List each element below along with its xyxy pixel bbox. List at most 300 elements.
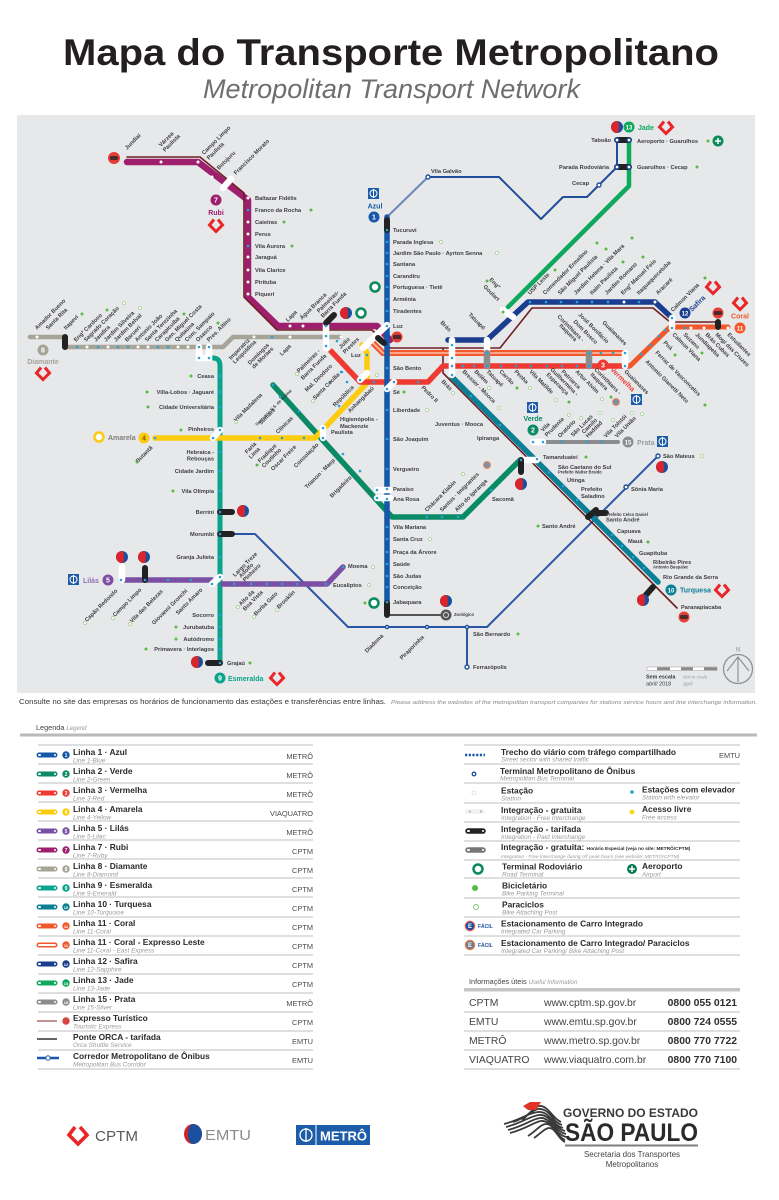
scale bar: Sem escala — [646, 674, 676, 680]
labels: line 15 and line 10: Vila Tolstói — [603, 414, 629, 439]
labels: line 15 and line 10: Paranapiacaba — [681, 605, 722, 611]
labels: line 8 Diamante: Jandira — [93, 324, 112, 343]
labels: line 7 Rubi: Palmeiras- — [316, 290, 341, 314]
icons: car parking stations — [484, 398, 620, 468]
labels: line 3 and line 11: Mogi das Cruzes — [714, 332, 750, 368]
label: Grajaú: Grajaú — [227, 661, 246, 667]
labels: line 4 Amarela: Butantã — [135, 445, 155, 464]
labels: northeast lines: Brás — [439, 320, 452, 333]
labels: line 1 Azul: Jardim São Paulo · Ayrton Senna — [393, 251, 483, 257]
labels: line 9 Esmeralda: Granja Julieta — [176, 555, 215, 561]
labels: line 5 Lilás: Giovanni Gronchi — [151, 588, 189, 626]
legend badges: 1 — [65, 753, 68, 759]
symbol: car parking: FÁCIL — [478, 923, 493, 930]
labels: line 15 and line 10: Prefeito Celso Daniel — [606, 512, 648, 517]
logo: EMTU: EMTU — [205, 1127, 251, 1144]
legend: line names: Line 11-Coral - East Express — [73, 948, 155, 954]
labels: line 15 and line 10: Saladino — [581, 494, 605, 500]
logo: Governo do Estado de São Paulo: Metropolitanos — [606, 1160, 658, 1169]
labels: northeast lines: Itaim Paulista — [589, 266, 620, 296]
labels: northeast lines: São Miguel Paulista — [557, 254, 600, 296]
line badges: 5 — [106, 578, 110, 584]
labels: line 15 and line 10: Vila União — [614, 415, 638, 439]
line: tourist express — [127, 157, 717, 608]
labels: line 15 and line 10: Santo André — [542, 524, 576, 530]
symbol: car parking and bike post — [465, 940, 493, 950]
line names: Esmeralda — [228, 676, 264, 683]
labels: line 3 and line 11: Guaianases — [601, 320, 627, 347]
legend: line names: Line 4-Yellow — [73, 814, 111, 822]
labels: line 3 and line 11: Guilhermina - — [549, 367, 579, 397]
symbol labels: Estações com elevador — [642, 784, 736, 794]
labels: line 7 Rubi — [124, 125, 349, 323]
labels: line 15 and line 10: Santo André — [606, 518, 640, 524]
line badges: 4 — [142, 436, 146, 442]
labels: line 8 Diamante: Lapa — [279, 343, 293, 357]
labels: line 5 Lilás: Santo Amaro — [175, 587, 205, 616]
labels: northeast lines: USP Leste — [527, 272, 551, 296]
legend: line names: Line 1-Blue — [73, 758, 106, 764]
labels: line 3 and line 11: Corinthians - — [556, 314, 585, 343]
labels: line 3 and line 11: Patriarca — [560, 369, 582, 391]
labels: line 1 Azul: Vergueiro — [393, 467, 420, 473]
legend: line names: CPTM — [292, 942, 313, 951]
labels: line 9 Esmeralda: Berrini — [196, 510, 214, 516]
labels: northeast lines: Aracaré — [655, 277, 674, 296]
labels: line 5 Lilás: Capão Redondo — [84, 588, 120, 623]
labels: line 8 Diamante: Barueri — [124, 325, 143, 343]
line 2 Verde — [273, 385, 520, 517]
labels: line 4 Amarela: Oscar Freire — [270, 444, 298, 472]
labels: line 3 and line 11: Antonio Gianetti Neto — [644, 359, 690, 405]
symbol: airport — [627, 864, 637, 874]
legend: line names: Linha 11 · Coral - Expresso Leste — [73, 937, 205, 947]
labels: line 9 Esmeralda: Villa-Lobos · Jaguaré — [157, 390, 214, 396]
line 11 Coral — [630, 327, 728, 366]
labels: line 1 Azul: Carandiru — [393, 274, 420, 280]
legend badges: 5 — [65, 829, 68, 835]
labels: line 15 and line 10: Prefeito — [581, 487, 603, 493]
logo: Metrô: METRÔ — [320, 1128, 367, 1144]
labels: line 15 and line 10: Zoológico — [454, 612, 474, 617]
symbol labels: Integração - gratuita: Horário Especial (veja no site: METRÔ/CPTM) — [501, 842, 691, 852]
line 15 Prata — [533, 440, 618, 444]
symbol labels: Street sector with shared traffic — [501, 756, 590, 764]
legend: line names: Line 10-Turquoise — [73, 910, 124, 916]
legend: line names: Touristic Express — [73, 1024, 122, 1030]
labels: line 9 Esmeralda: Vila Olímpia — [182, 489, 215, 495]
labels: northeast lines: Engº — [488, 277, 501, 290]
logo: CPTM — [69, 1127, 138, 1145]
legend: line names: Linha 9 · Esmeralda — [73, 880, 152, 890]
labels: line 8 Diamante: Carapicuíba — [154, 316, 182, 343]
labels: northeast lines: Cecap — [572, 181, 590, 187]
line 1 Azul — [384, 217, 390, 615]
legend heading: Legenda Legend — [36, 723, 87, 732]
labels: line 3 and line 11: Penha — [513, 369, 529, 386]
line badges: 3 — [601, 362, 605, 370]
legend badges: 15 — [64, 1000, 69, 1005]
labels: line 2 west: Trianon · Masp — [304, 457, 337, 490]
useful information table: www.emtu.sp.gov.br — [543, 1017, 637, 1028]
legend: line names: Linha 2 · Verde — [73, 766, 133, 776]
labels: line 9 Esmeralda: Socorro — [192, 613, 215, 619]
symbol labels: Trecho do viário com tráfego compartilhado — [501, 747, 676, 757]
legend swatches — [39, 755, 55, 1002]
station rings: bus terminals — [385, 138, 660, 669]
useful information table — [464, 977, 740, 1069]
labels: central area: Barra Funda — [300, 353, 329, 381]
legend: line names: Linha 13 · Jade — [73, 975, 134, 985]
labels: line 3 and line 11: José Bonifácio — [577, 312, 610, 345]
labels: line 2 west: Sumaré — [258, 407, 277, 426]
labels: line 3 and line 11: Bresser - Mooca — [461, 369, 497, 405]
labels: line 3 and line 11: Itaquera — [558, 323, 578, 344]
labels: line 15 and line 10 — [454, 414, 722, 671]
labels: line 1 Azul: São Bento — [393, 366, 422, 372]
labels: line 15 and line 10: Haddad — [585, 420, 605, 439]
labels: line 8 Diamante: Domingos — [247, 343, 271, 366]
symbol: free interchange — [465, 809, 485, 814]
symbol: free access — [630, 810, 634, 814]
labels: line 9 Esmeralda: Rebouças — [187, 456, 214, 462]
symbol: bike post — [474, 904, 478, 910]
labels: line 9 Esmeralda: Cidade Jardim — [175, 469, 214, 475]
labels: line 15 and line 10: Oratório — [557, 419, 578, 439]
useful information table: www.metro.sp.gov.br — [543, 1036, 641, 1047]
legend: line names: EMTU — [292, 1056, 313, 1065]
useful information table: METRÔ — [469, 1034, 507, 1047]
labels: line 3 and line 11: Brás Cubas — [704, 332, 730, 359]
line badges: 1 — [372, 214, 376, 222]
labels: line 15 and line 10: Vila — [540, 421, 552, 433]
labels: line 8 Diamante: Engº Cardoso — [73, 312, 104, 343]
legend: line names: VIAQUATRO — [270, 809, 313, 818]
useful information table: 0800 770 7722 — [668, 1036, 737, 1047]
labels: line 9 Esmeralda: Morumbi — [190, 532, 214, 538]
labels: line 8 Diamante: Jardim Belval — [113, 313, 144, 343]
labels: line 4 Amarela: Clínicas — [275, 416, 295, 435]
labels: line 15 and line 10: São Lucas — [570, 414, 595, 438]
labels: line 1 Azul: Vila Mariana — [393, 525, 427, 531]
labels: line 5 Lilás: Adolfo — [238, 562, 256, 579]
useful information table: 0800 724 0555 — [668, 1017, 737, 1028]
logo: Governo do Estado de São Paulo: SÃO PAULO — [565, 1117, 698, 1147]
symbol labels: Airport — [641, 872, 661, 878]
legend: line names: Linha 15 · Prata — [73, 994, 136, 1004]
symbol labels: Station — [501, 796, 521, 802]
labels: line 8 Diamante: Osasco — [195, 324, 214, 343]
symbol: off-peak interchange — [468, 847, 483, 853]
legend: line names: CPTM — [292, 1018, 313, 1027]
labels: line 1 Azul: Sé — [393, 390, 400, 396]
labels: line 7 Rubi: Botujuru — [216, 150, 238, 171]
icon: airport — [712, 136, 724, 146]
labels: line 5 Lilás: Piraporinha — [399, 634, 426, 661]
labels: line 3 and line 11: Carrão — [498, 369, 515, 387]
labels: line 7 Rubi: Água Branca — [298, 291, 329, 321]
legend: line names: Corredor Metropolitano de Ônibus — [73, 1050, 210, 1061]
labels: line 3 and line 11 — [461, 312, 752, 405]
legend: line names: Expresso Turístico — [73, 1013, 148, 1023]
labels: line 4 Amarela — [135, 416, 378, 472]
scale bar: abril/ 2018 — [646, 682, 671, 688]
legend: line names: Line 15-Silver — [73, 1004, 113, 1012]
logo: CPTM: CPTM — [95, 1128, 138, 1145]
symbol labels: Integrated Car Parking — [501, 928, 566, 936]
labels: line 2 west — [233, 388, 515, 513]
labels: line 5 Lilás: Pinheiro — [242, 563, 263, 583]
legend: line names: Line 8-Diamond — [73, 872, 119, 878]
useful information table: EMTU — [469, 1017, 498, 1028]
labels: line 15 and line 10: Prefeito Walter Braido — [558, 470, 602, 474]
symbol labels: Estacionamento de Carro Integrado — [501, 918, 643, 928]
legend: line names: Metropolitan Bus Corridor — [73, 1062, 147, 1068]
labels: line 15 and line 10: Prudente — [544, 417, 566, 438]
labels: line 3 and line 11: Itaquera — [589, 372, 609, 393]
symbol: shared traffic — [465, 754, 485, 756]
labels: line 3 and line 11: Poá — [662, 340, 674, 352]
legend: line names: Line 11-Coral — [73, 928, 111, 936]
legend: line names: Linha 8 · Diamante — [73, 861, 148, 871]
labels: northeast lines: Jardim Helena · Vila Mara — [573, 243, 627, 296]
labels: line 1 Azul: Conceição — [393, 585, 422, 591]
labels: northeast lines: Guarulhos · Cecap — [637, 165, 688, 171]
labels: line 5 Lilás: Boa Vista — [242, 589, 265, 612]
line 5 Lilás — [122, 567, 343, 584]
line badges: 12 — [682, 312, 689, 318]
labels: line 9 Esmeralda: Pinheiros — [188, 427, 214, 433]
labels: line 7 Rubi: Jundiaí — [124, 133, 143, 151]
labels: line 8 Diamante: Júlio — [338, 336, 352, 350]
symbol: paid interchange — [468, 828, 483, 834]
labels: northeast lines — [431, 138, 702, 333]
legend: line names: METRÔ — [286, 828, 313, 837]
line 10 Turquesa — [452, 377, 658, 582]
legend: corridor swatch — [37, 1056, 59, 1060]
legend: line names: METRÔ — [286, 999, 313, 1008]
labels: line 15 and line 10: Rio Grande da Serra — [663, 575, 719, 581]
labels: line 8 Diamante: Santa Terezinha — [144, 308, 180, 343]
legend: line names: Line 12-Sapphire — [73, 966, 122, 974]
line badges — [38, 122, 746, 684]
legend heading — [20, 723, 757, 736]
labels: northeast lines: Engº Manuel Feio — [620, 258, 658, 296]
legend badges: 11 — [64, 924, 69, 929]
symbol labels: Road Terminal — [502, 872, 544, 878]
note: english: Please address the websites of the metropolitan transport companies for stations service hours and line interchange information. — [391, 700, 757, 706]
labels: line 1 Azul: São Joaquim — [393, 437, 428, 443]
legend: orca swatch — [37, 1038, 57, 1040]
labels: line 4 Amarela: Faria — [244, 441, 259, 455]
labels: line 9 Esmeralda: Jurubatuba — [183, 625, 215, 631]
labels: line 8 Diamante: Leopoldina — [232, 339, 258, 365]
interchanges — [65, 140, 718, 663]
labels: line 15 and line 10: Antonio Bespalec — [653, 564, 689, 570]
labels: line 3 and line 11: Suzano — [682, 332, 700, 351]
line badges: 9 — [218, 676, 222, 682]
labels: line 15 and line 10: Ribeirão Pires — [653, 560, 691, 566]
legend badges: 10 — [64, 905, 69, 910]
symbol labels: Bike Attaching Post — [502, 910, 557, 916]
labels: line 5 Lilás: Alto da — [238, 589, 257, 607]
line 11 Coral express — [369, 339, 625, 353]
symbol: station — [472, 791, 476, 795]
labels: central area: Juventus · Mooca — [435, 422, 484, 428]
line 7 Rubi — [127, 162, 390, 340]
symbol: bus terminal — [472, 772, 476, 776]
symbol labels: Integração - tarifada — [501, 824, 581, 834]
legend: lines table — [37, 745, 313, 1069]
legend: line names: Linha 7 · Rubi — [73, 842, 128, 852]
labels: line 7 Rubi: Franco da Rocha — [255, 208, 302, 214]
labels: line 8 Diamante: Pres. Altino — [206, 317, 233, 343]
labels: central area: Palmeiras - — [296, 349, 322, 374]
labels: central area: Pedro II — [420, 385, 439, 404]
legend: line names: Line 2-Green — [73, 776, 111, 784]
symbol labels: Estacionamento de Carro Integrado/ Paraciclos — [501, 938, 690, 948]
labels: line 7 Rubi: Caieiras — [255, 220, 277, 226]
icons: tourist train — [108, 152, 724, 622]
labels: northeast lines: Taboão — [591, 138, 612, 144]
labels: line 1 Azul: Tucuruvi — [393, 228, 417, 234]
labels: line 3 and line 11: Guaianases — [623, 369, 649, 396]
legend: line names: Linha 12 · Safira — [73, 956, 138, 966]
icon: zoo — [440, 610, 452, 620]
labels: line 1 Azul: São Judas — [393, 574, 421, 580]
legend badges: 2 — [65, 772, 68, 778]
labels: line 9 Esmeralda: Autódromo — [183, 637, 215, 643]
legend: line names: METRÔ — [286, 752, 313, 761]
legend: line names: Linha 3 · Vermelha — [73, 785, 147, 795]
useful information table: CPTM — [469, 998, 498, 1009]
legend badges: 13 — [64, 981, 69, 986]
labels: line 9 Esmeralda: Cidade Universitária — [159, 405, 215, 411]
labels: line 1 Azul: Santana — [393, 262, 416, 268]
labels: line 2 west: Alto do Ipiranga — [454, 478, 490, 513]
line 3 Vermelha — [330, 350, 630, 382]
symbol labels: Integration - Free Interchange — [501, 815, 586, 822]
labels: line 15 and line 10: Mauá — [628, 539, 643, 545]
legend: line names: METRÔ — [286, 771, 313, 780]
legend: line names: CPTM — [292, 980, 313, 989]
legend badges: 9 — [65, 886, 68, 892]
north arrow: N — [736, 648, 740, 654]
labels: line 9 Esmeralda: Hebraica - — [186, 450, 214, 456]
labels: central area: Santa Cecília — [312, 372, 342, 401]
legend: line names: Linha 4 · Amarela — [73, 804, 143, 814]
useful information table: www.cptm.sp.gov.br — [543, 998, 637, 1009]
labels: central area: República — [332, 384, 356, 408]
symbol labels: Integration - Free Interchange during off-peak hours (see website: METRÔ/CPTM) — [501, 853, 680, 860]
legend badges: 11 — [64, 943, 69, 948]
labels: line 7 Rubi: Barra Funda — [320, 291, 349, 319]
line names: Jade — [638, 125, 654, 132]
legend badges: 4 — [65, 810, 68, 816]
labels: line 7 Rubi: Perus — [255, 232, 271, 238]
labels: line 7 Rubi: Várzea — [158, 131, 176, 148]
legend: line names: CPTM — [292, 847, 313, 856]
line names: Verde — [523, 416, 543, 423]
legend badges: 3 — [65, 791, 68, 797]
labels: line 15 and line 10: São Caetano do Sul — [558, 465, 612, 471]
labels: line 7 Rubi: Lapa — [285, 309, 299, 323]
useful information table: Informações úteis Useful Information — [469, 977, 578, 986]
symbol labels: Estação — [501, 786, 533, 796]
labels: line 15 and line 10: Camilo — [581, 417, 599, 435]
labels: line 7 Rubi: Campo Limpo — [201, 125, 233, 156]
labels: line 4 Amarela: Paulista — [331, 430, 354, 436]
legend: line names: CPTM — [292, 961, 313, 970]
labels: line 7 Rubi: Vila Aurora — [255, 244, 286, 250]
legend: line names: Ponte ORCA - tarifada — [73, 1032, 161, 1042]
labels: line 3 and line 11: Calmon Viana — [671, 332, 702, 364]
labels: northeast lines: Itaquaquecetuba — [636, 260, 673, 296]
symbol: road terminal — [474, 864, 482, 874]
line names: Rubi — [208, 210, 224, 217]
line badges: 10 — [668, 588, 675, 594]
north arrow — [724, 648, 752, 684]
labels: line 15 and line 10: Capuava — [617, 529, 642, 535]
labels: line 1 Azul: Santa Cruz — [393, 537, 423, 543]
labels: line 8 Diamante: Com. Sampaio — [184, 311, 217, 343]
subtitle: Metropolitan Transport Network — [203, 74, 582, 104]
line names: Diamante — [27, 359, 59, 366]
labels: line 8 Diamante: Prestes — [342, 337, 361, 355]
labels: line 7 Rubi: Francisco Morato — [233, 138, 271, 176]
labels: line 3 and line 11: Vila Matilde — [528, 369, 554, 395]
line badges: 13 — [626, 126, 633, 132]
logo: EMTU — [184, 1124, 251, 1144]
line names: Coral — [731, 314, 749, 320]
legend: line names: Orca Shuttle Service — [73, 1042, 132, 1049]
scale bar: Not to scale — [683, 674, 708, 680]
symbol labels: Integration - Paid Interchange — [501, 834, 586, 841]
symbol labels: Acesso livre — [642, 804, 692, 814]
labels: line 15 and line 10: Sônia Maria — [631, 487, 664, 493]
legend: line names: METRÔ — [286, 790, 313, 799]
useful information table: www.viaquatro.com.br — [543, 1055, 647, 1066]
labels: line 2 west: Santuário N.S. de Fátima — [254, 388, 293, 427]
bike markers — [82, 141, 708, 663]
line names: Vermelha — [609, 366, 636, 394]
legend: line names: CPTM — [292, 866, 313, 875]
symbol labels: Paraciclos — [502, 900, 544, 910]
labels: line 1 Azul: Jabaquara — [393, 600, 422, 606]
symbol labels: Integração - gratuita — [501, 805, 582, 815]
labels: line 3 and line 11: Belém — [473, 369, 489, 385]
labels: line 4 Amarela: Fradique — [257, 443, 278, 464]
labels: line 3 and line 11: Esperança — [545, 372, 570, 397]
labels: northeast lines: Vila Galvão — [431, 169, 462, 175]
icons: CPTM diamonds — [36, 122, 746, 684]
symbol: car parking — [465, 921, 493, 931]
labels: northeast lines: Goulart — [482, 284, 500, 303]
legend: line names: CPTM — [292, 885, 313, 894]
symbol: car parking and bike post: FÁCIL — [478, 942, 493, 949]
labels: line 5 Lilás — [84, 552, 426, 661]
legend: line names: Line 5-Lilac — [73, 834, 106, 840]
labels: line 9 Esmeralda — [154, 374, 215, 653]
labels: line 1 Azul: Paraíso — [393, 487, 414, 493]
legend badges: 12 — [64, 962, 69, 967]
labels: line 7 Rubi: Paulista — [206, 141, 226, 161]
labels: line 3 and line 11: Artur Alvim — [574, 369, 600, 395]
labels: line 1 Azul: Saúde — [393, 562, 410, 568]
labels: line 7 Rubi: Piqueri — [255, 292, 275, 298]
symbol labels: Bike Parking Terminal — [502, 890, 565, 898]
labels: line 2 west: Sacomã — [492, 497, 515, 503]
